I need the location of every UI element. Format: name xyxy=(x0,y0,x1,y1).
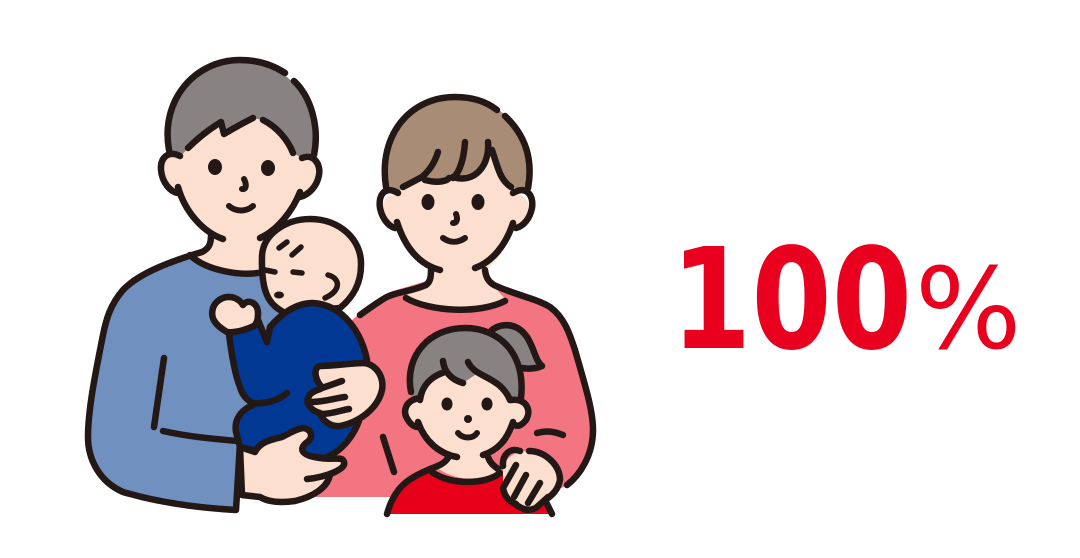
percent sign: % xyxy=(915,245,1021,375)
baby xyxy=(212,219,367,458)
girl eyes, nose and mouth xyxy=(442,398,492,438)
baby leg crease xyxy=(253,393,287,403)
father xyxy=(88,60,319,510)
mother eyes, nose and mouth xyxy=(422,194,484,242)
baby face xyxy=(265,242,337,298)
number 100: 100 xyxy=(671,219,912,382)
father hair xyxy=(168,60,315,158)
father eyes, nose and mouth xyxy=(208,159,275,210)
mother outlines xyxy=(360,97,593,485)
mother hand on girl shoulder xyxy=(502,450,560,510)
mother hand holding baby xyxy=(308,363,382,426)
illustration: family xyxy=(88,60,593,514)
girl hair xyxy=(411,325,542,400)
thumb crease xyxy=(307,472,335,479)
mother neck and face xyxy=(382,130,530,308)
hand finger lines xyxy=(311,381,349,414)
girl xyxy=(387,325,560,514)
mother sweater xyxy=(313,280,593,497)
father sweater xyxy=(88,255,280,510)
baby mitten xyxy=(212,297,258,332)
father hand holding baby xyxy=(240,428,344,502)
father outlines xyxy=(88,60,319,510)
mother hair xyxy=(385,97,529,193)
girl face and neck xyxy=(406,350,527,479)
girl outlines xyxy=(387,325,552,514)
baby outfit xyxy=(229,303,367,458)
father face and neck xyxy=(160,100,316,274)
mother xyxy=(313,97,593,497)
baby head xyxy=(262,219,361,313)
statistic: 100% xyxy=(671,219,1021,382)
girl shirt xyxy=(387,470,552,514)
